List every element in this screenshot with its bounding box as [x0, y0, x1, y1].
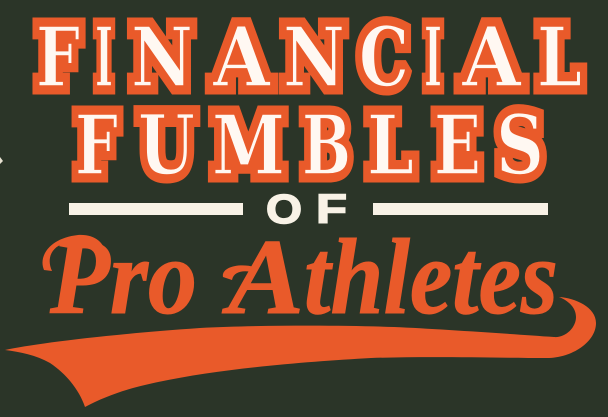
title: Financial Fumbles: N — [283, 10, 345, 106]
title: Financial Fumbles: L — [367, 98, 414, 194]
script heading: Pro Athletes: thletes — [304, 218, 558, 337]
title: Financial Fumbles: F — [75, 98, 118, 194]
word: OF: O — [266, 186, 302, 232]
title: Financial Fumbles: L — [537, 10, 582, 106]
title: Financial Fumbles: L — [537, 10, 582, 106]
title: Financial Fumbles: C — [359, 10, 409, 106]
script heading: Pro Athletes: Pro — [49, 218, 197, 337]
title: Financial Fumbles: M — [212, 98, 285, 194]
title: Financial Fumbles: F — [36, 10, 80, 106]
title: Financial Fumbles: E — [434, 98, 481, 194]
title: Financial Fumbles: I — [95, 10, 113, 106]
swoosh underline — [5, 297, 596, 407]
title: Financial Fumbles: A — [461, 10, 522, 106]
title: Financial Fumbles: N — [283, 10, 345, 106]
word: OF — [266, 186, 347, 232]
title: Financial Fumbles: E — [434, 98, 481, 194]
title: Financial Fumbles: B — [302, 98, 351, 194]
title: Financial Fumbles: U — [138, 98, 195, 194]
script heading: Pro Athletes — [42, 218, 558, 337]
divider bar: left — [69, 203, 243, 215]
title: Financial Fumbles: A — [212, 10, 271, 106]
small star fragment at left edge — [0, 157, 3, 164]
divider bar: right — [373, 203, 548, 215]
title: Financial Fumbles: A — [212, 10, 271, 106]
word: OF: F — [316, 186, 347, 232]
title: Financial Fumbles: N — [131, 10, 193, 106]
title: Financial Fumbles: I — [424, 10, 442, 106]
script heading: Pro Athletes: A — [222, 218, 304, 337]
title: Financial Fumbles: F — [36, 10, 80, 106]
title: Financial Fumbles: F — [75, 98, 118, 194]
title: Financial Fumbles: C — [359, 10, 409, 106]
title: Financial Fumbles: S — [496, 98, 544, 194]
title: Financial Fumbles: L — [367, 98, 414, 194]
title: Financial Fumbles: N — [131, 10, 193, 106]
title: Financial Fumbles: B — [302, 98, 351, 194]
title: Financial Fumbles: I — [424, 10, 442, 106]
title: Financial Fumbles: M — [212, 98, 285, 194]
title: Financial Fumbles: S — [496, 98, 544, 194]
title: Financial Fumbles: I — [95, 10, 113, 106]
title: Financial Fumbles: U — [138, 98, 195, 194]
title: Financial Fumbles: A — [461, 10, 522, 106]
title: Financial Fumbles — [36, 10, 582, 194]
